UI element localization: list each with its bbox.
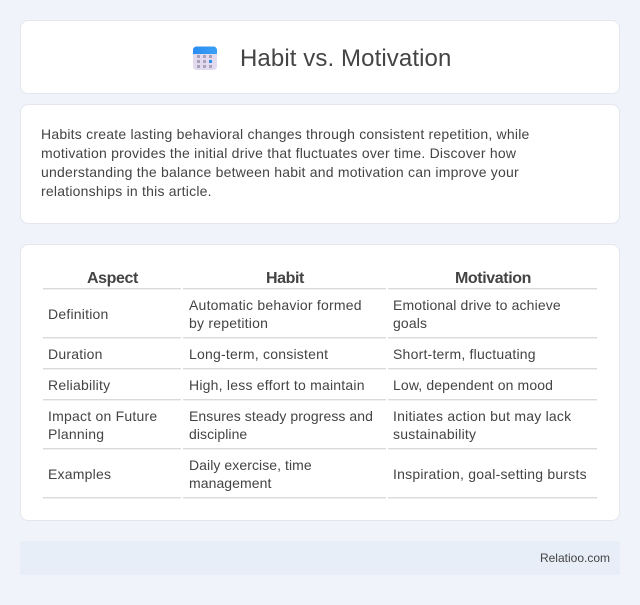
row: definition: Definition: [48, 306, 109, 322]
panel: comparison table: Short-term, fluctuating: [393, 346, 536, 362]
panel: comparison table: management: [189, 475, 271, 491]
row: duration: Duration: [48, 346, 103, 362]
panel: comparison table: discipline: [189, 426, 247, 442]
title: Habit vs. Motivation: [240, 45, 451, 72]
text block: introduction: motivation provides the initial drive that fluctuates over time. Discover how: [41, 145, 516, 161]
panel: comparison table: by repetition: [189, 315, 268, 331]
row: impact on future planning: Planning: [48, 426, 104, 442]
text block: introduction: understanding the balance between habit and motivation can improve your: [41, 164, 519, 180]
panel: comparison table: Ensures steady progress and: [189, 408, 373, 424]
panel: comparison table: sustainability: [393, 426, 476, 442]
panel: comparison table: Emotional drive to achieve: [393, 297, 561, 313]
panel: title card: [20, 20, 620, 94]
panel: comparison table: goals: [393, 315, 427, 331]
panel: introduction: [20, 104, 620, 224]
panel: comparison table: Initiates action but may lack: [393, 408, 571, 424]
footer credit: Relatioo.com: [540, 551, 610, 565]
panel: comparison table: High, less effort to maintain: [189, 377, 365, 393]
panel: comparison table: Low, dependent on mood: [393, 377, 553, 393]
row: impact on future planning: [48, 408, 157, 442]
text block: introduction: Habits create lasting behavioral changes through consistent repetition, while: [41, 126, 530, 142]
table header: habit: Habit: [266, 270, 304, 287]
panel: comparison table: [20, 244, 620, 521]
row: examples: Examples: [48, 466, 111, 482]
table header: aspect: Aspect: [87, 270, 138, 287]
panel: comparison table: Automatic behavior formed: [189, 297, 362, 313]
panel: comparison table: Inspiration, goal-setting bursts: [393, 466, 587, 482]
text block: introduction: relationships in this article.: [41, 183, 212, 199]
row: reliability: Reliability: [48, 377, 110, 393]
row: impact on future planning: Impact on Future: [48, 408, 157, 424]
footer bar: [20, 541, 620, 575]
panel: comparison table: Long-term, consistent: [189, 346, 328, 362]
icon: calendar: [193, 46, 217, 70]
panel: comparison table: Daily exercise, time: [189, 457, 312, 473]
table header: motivation: Motivation: [455, 270, 531, 287]
text block: introduction: [41, 126, 530, 199]
